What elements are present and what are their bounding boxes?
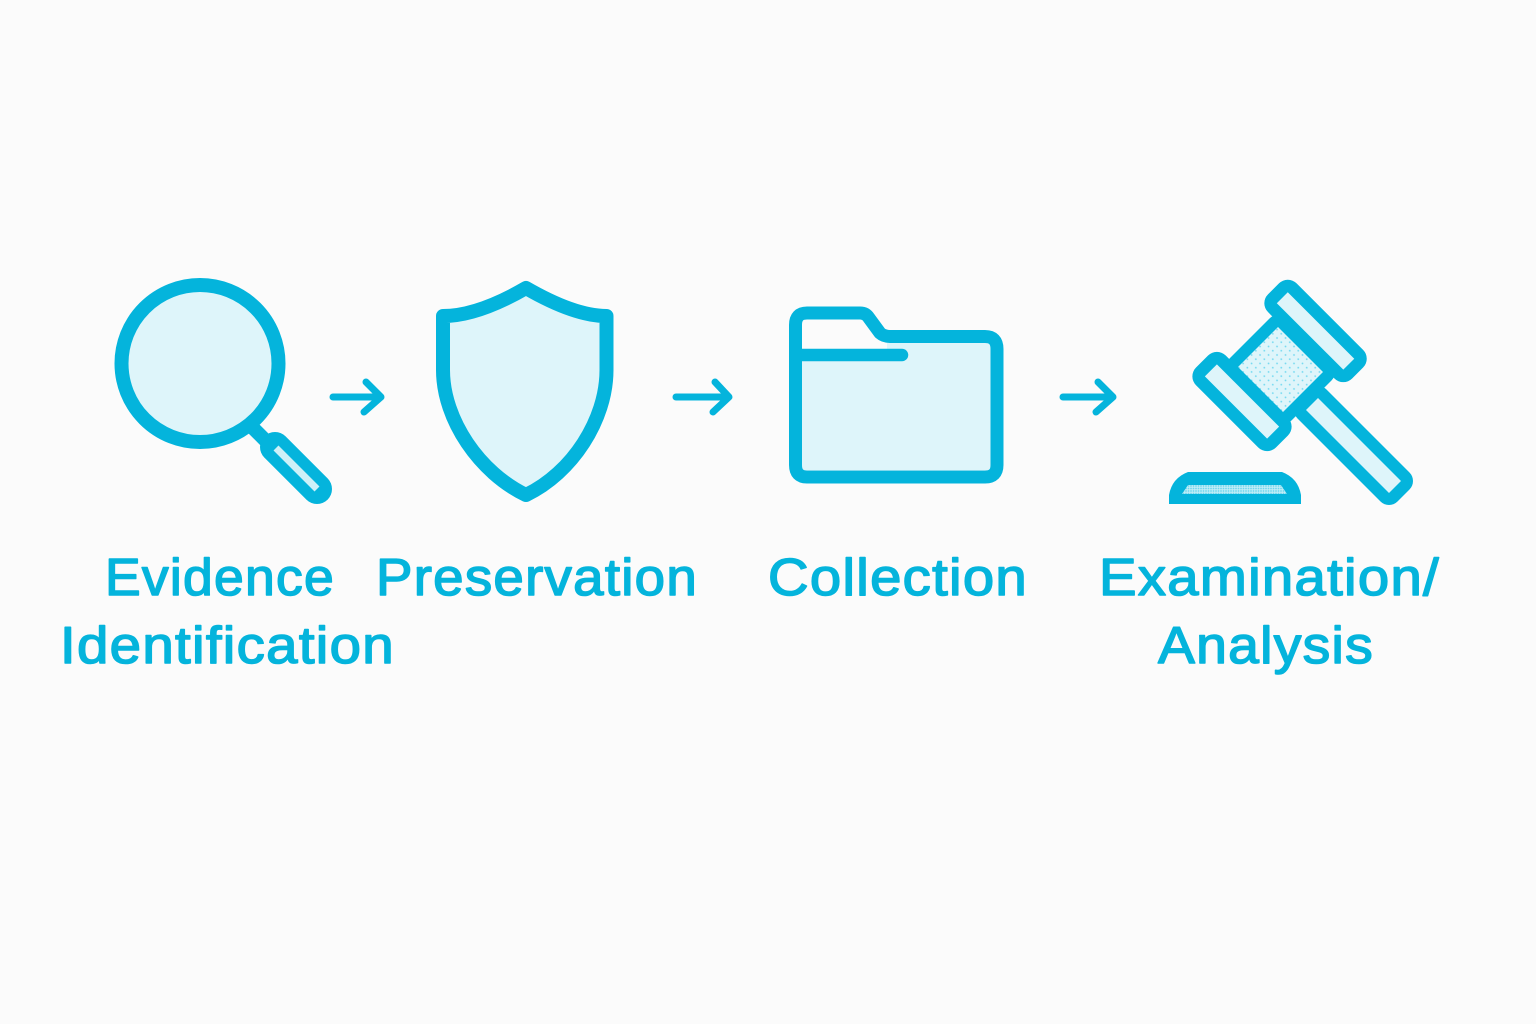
- icon: shield: [443, 288, 606, 495]
- arrow: identification to preservation: [333, 382, 381, 412]
- label: Examination / Analysis: Examination/: [1099, 549, 1440, 607]
- label: Evidence Identification: Identification: [60, 617, 395, 675]
- step 3: collection: [768, 313, 1028, 607]
- label: Evidence Identification: Evidence: [105, 549, 335, 607]
- arrow: collection to examination: [1063, 382, 1113, 412]
- label: Examination / Analysis: Analysis: [1158, 617, 1374, 675]
- arrow: preservation to collection: [676, 382, 729, 412]
- icon: folder: [796, 313, 997, 477]
- step 2: preservation: [376, 288, 698, 607]
- label: Examination / Analysis: [1099, 549, 1440, 675]
- label: Preservation: Preservation: [376, 549, 698, 607]
- icon: gavel: [1169, 292, 1401, 504]
- icon: magnifying glass: [122, 285, 317, 489]
- step 4: examination / analysis: [1099, 292, 1440, 675]
- label: Collection: Collection: [768, 549, 1028, 607]
- step 1: evidence identification: [60, 285, 395, 675]
- label: Evidence Identification: [60, 549, 395, 675]
